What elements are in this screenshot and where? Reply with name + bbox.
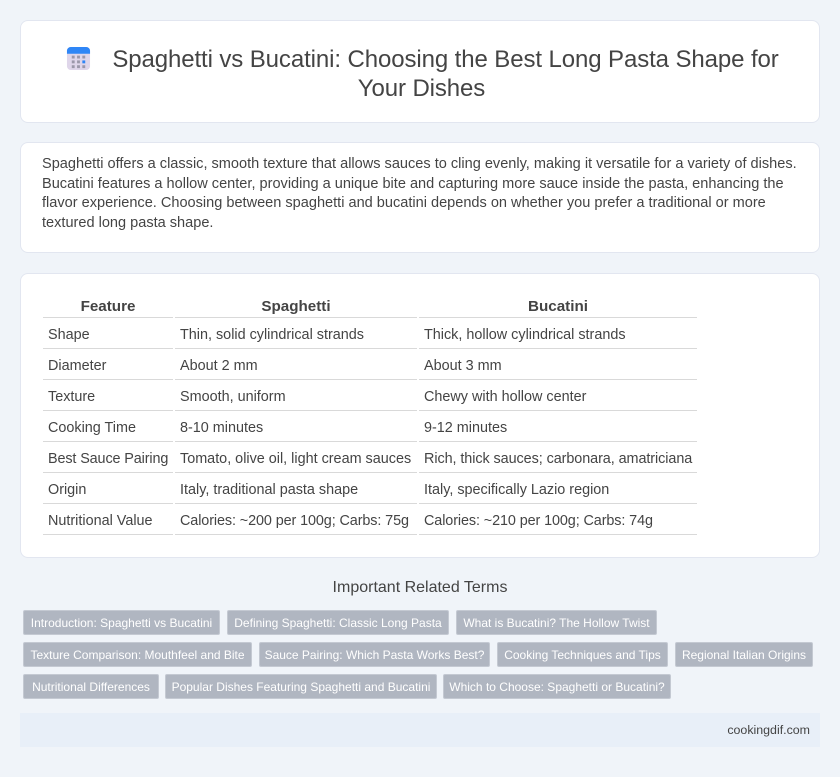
tag: Texture Comparison: Mouthfeel and Bite [30,648,245,662]
heading: important related terms: Important Related Terms [333,579,507,596]
title: Your Dishes [358,75,485,102]
panel: title card [20,20,820,123]
tag [259,642,490,667]
intro text [42,156,797,230]
tag: Popular Dishes Featuring Spaghetti and Bucatini [172,680,430,694]
panel: comparison table [20,273,820,558]
title [112,46,779,102]
tag: Sauce Pairing: Which Pasta Works Best? [265,648,484,662]
intro text: Spaghetti offers a classic, smooth texture that allows sauces to cling evenly, making it versatile for a variety of dishes. [42,156,797,172]
comparison table: Italy, traditional pasta shape [180,482,358,498]
comparison table: Chewy with hollow center [424,389,586,405]
comparison table: Nutritional Value [48,513,153,529]
tag [497,642,668,667]
comparison table: Diameter [48,358,106,374]
icon: calendar [66,47,90,70]
tag: Introduction: Spaghetti vs Bucatini [31,616,212,630]
table header [81,298,588,315]
table header: Bucatini [528,298,588,315]
title: Spaghetti vs Bucatini: Choosing the Best Long Pasta Shape for [112,46,779,73]
comparison table: Rich, thick sauces; carbonara, amatriciana [424,451,692,467]
comparison table: Thin, solid cylindrical strands [180,327,364,343]
comparison table: Cooking Time [48,420,136,436]
footer bar [20,713,820,747]
comparison table: Italy, specifically Lazio region [424,482,609,498]
comparison table: Best Sauce Pairing [48,451,168,467]
comparison table: About 3 mm [424,358,502,374]
intro text: flavor experience. Choosing between spaghetti and bucatini depends on whether you prefer a traditional or more [42,195,766,211]
tag: Which to Choose: Spaghetti or Bucatini? [449,680,665,694]
tag [23,674,159,699]
tag [675,642,813,667]
table header: Spaghetti [261,298,331,315]
comparison table: Calories: ~210 per 100g; Carbs: 74g [424,513,653,529]
comparison table: Origin [48,482,86,498]
comparison table: 8-10 minutes [180,420,263,436]
tag: Regional Italian Origins [682,648,806,662]
comparison table: Smooth, uniform [180,389,286,405]
tag: What is Bucatini? The Hollow Twist [463,616,650,630]
tag [227,610,449,635]
tag [456,610,657,635]
comparison table [43,298,697,535]
intro text: textured long pasta shape. [42,214,213,230]
comparison table: 9-12 minutes [424,420,507,436]
tag [165,674,437,699]
comparison table: Shape [48,327,90,343]
tags: related terms [23,610,813,699]
comparison table: Calories: ~200 per 100g; Carbs: 75g [180,513,409,529]
footer credit: cookingdif.com [727,723,810,737]
table header: Feature [81,298,135,315]
tag: Defining Spaghetti: Classic Long Pasta [234,616,442,630]
panel: introduction [20,142,820,253]
tag [443,674,671,699]
tag [23,642,252,667]
tag: Cooking Techniques and Tips [504,648,661,662]
tag [23,610,220,635]
comparison table: Texture [48,389,95,405]
comparison table: Thick, hollow cylindrical strands [424,327,626,343]
comparison table: Tomato, olive oil, light cream sauces [180,451,411,467]
intro text: Bucatini features a hollow center, providing a unique bite and capturing more sauce inside the pasta, enhancing the [42,176,784,192]
comparison table: About 2 mm [180,358,258,374]
tag: Nutritional Differences [32,680,150,694]
